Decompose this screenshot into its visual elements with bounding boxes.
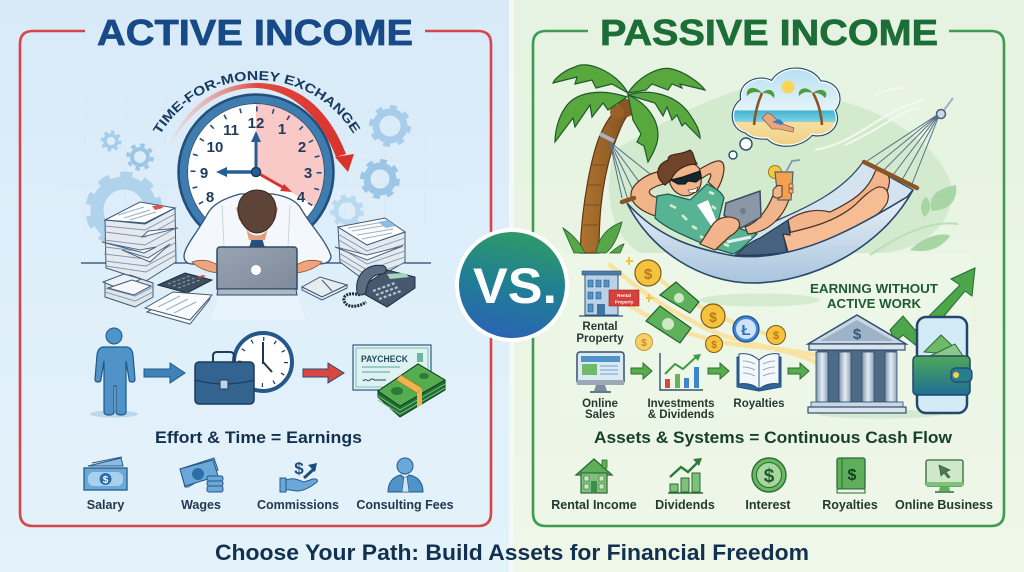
- icon: rental building: Rental: [617, 293, 631, 298]
- icon: rental building: [579, 271, 639, 316]
- palm tree: [553, 65, 705, 253]
- palm fronds: [553, 65, 705, 162]
- label: online sales: Online: [582, 398, 618, 410]
- green growth arrow: [890, 268, 975, 347]
- shirt: [655, 184, 757, 254]
- label: online business: Online Business: [895, 498, 993, 512]
- title: passive income: PASSIVE INCOME: [600, 12, 938, 53]
- title: active income: ACTIVE INCOME: [97, 12, 413, 53]
- clock numbers: 1: [278, 121, 286, 138]
- vs badge: [455, 228, 569, 342]
- label: rental property: Rental: [582, 321, 618, 333]
- lower panel tint: [560, 253, 970, 413]
- coins and banknotes: $: [711, 340, 717, 351]
- icon: investments chart: [660, 353, 703, 390]
- curved label: time-for-money exchange: TIME-FOR-MONEY EXCHANGE: [152, 70, 360, 134]
- arrow: royalties to bank: [788, 363, 809, 379]
- clock numbers: [200, 115, 312, 206]
- tablet: [700, 191, 761, 250]
- icon: salary: $: [103, 475, 109, 486]
- icon: online business monitor: [926, 460, 963, 492]
- earning caption second line: ACTIVE WORK: [827, 296, 922, 311]
- icon: commissions: $: [294, 459, 304, 478]
- footer headline: Choose Your Path: Build Assets for Financial Freedom: [215, 540, 809, 565]
- desk line: [81, 262, 431, 264]
- thought dots: [740, 138, 752, 150]
- notepad: [302, 277, 347, 300]
- decorative leaves: [870, 185, 958, 255]
- money flow ribbons: [610, 265, 815, 362]
- hammock ropes: [610, 98, 953, 200]
- icon: wages: [180, 458, 223, 492]
- office worker head down at desk: [184, 190, 331, 273]
- arrow: investments to royalties: [708, 363, 729, 379]
- label: commissions: Commissions: [257, 498, 339, 512]
- rear leg: [788, 169, 889, 240]
- spreader bars: [622, 198, 634, 202]
- ground shadow: [700, 294, 820, 306]
- label: investments and dividends: & Dividends: [648, 409, 714, 421]
- wind lines: [815, 88, 925, 150]
- clock numbers: 2: [298, 139, 306, 156]
- vs badge: VS.: [473, 258, 557, 314]
- clock numbers: 8: [206, 189, 214, 206]
- loose papers: [145, 292, 212, 324]
- icon: royalties book: $: [848, 467, 857, 484]
- coins and banknotes: $: [709, 309, 717, 325]
- clock numbers: 11: [223, 122, 239, 139]
- centre divider: [509, 0, 514, 572]
- clock numbers: 4: [297, 189, 306, 206]
- passive income frame: [533, 31, 1004, 526]
- coins and banknotes: [626, 257, 786, 352]
- red elapsed-time arrow: [168, 83, 354, 172]
- hand on tablet: [700, 217, 740, 250]
- head: [670, 162, 701, 196]
- left paper stack: [102, 202, 178, 281]
- label: investments and dividends: Investments: [647, 398, 715, 410]
- raised arm right: [695, 161, 724, 190]
- wall clock: [178, 94, 334, 250]
- laptop: [217, 247, 297, 295]
- icon: rental income house: [576, 459, 612, 493]
- coins and banknotes: $: [644, 266, 653, 283]
- label: online sales: Sales: [585, 409, 615, 421]
- clock numbers: 12: [248, 115, 264, 132]
- label: salary: Salary: [87, 498, 124, 512]
- coins and banknotes: Ł: [741, 322, 751, 339]
- right background: [513, 0, 1024, 572]
- icon: online sales monitor: [577, 352, 624, 392]
- icon: person: [90, 328, 138, 418]
- small paper pile: [103, 274, 153, 307]
- clock numbers: 9: [200, 165, 208, 182]
- hammock near band: [622, 162, 917, 283]
- forearm with drink: [745, 190, 790, 234]
- left background: [0, 0, 511, 572]
- coins and banknotes: $: [641, 338, 647, 349]
- arrow: effort to work: [144, 363, 185, 383]
- orange drink: [768, 160, 800, 200]
- equation: assets and systems: Assets & Systems = Continuous Cash Flow: [594, 428, 953, 447]
- laptop glow on desk: [210, 295, 306, 320]
- passive scene: green hill: [609, 88, 952, 253]
- active income frame: [20, 31, 491, 526]
- earning caption: EARNING WITHOUT: [810, 281, 938, 296]
- label: consulting fees: Consulting Fees: [356, 498, 454, 512]
- arrow: work to pay: [303, 363, 344, 383]
- label: rental property: Property: [576, 333, 624, 345]
- icon: interest coin: [752, 458, 786, 492]
- label: dividends: Dividends: [655, 498, 715, 512]
- icon: paycheck and cash: PAYCHECK: [361, 354, 408, 365]
- relaxing man in hammock: [631, 150, 889, 255]
- phone and wallet: [913, 317, 972, 413]
- clock numbers: 3: [304, 165, 312, 182]
- shorts: [737, 220, 790, 255]
- bank building: $: [853, 326, 862, 343]
- icon: dividends chart: [668, 458, 703, 493]
- equation: effort and time: Effort & Time = Earnings: [155, 428, 362, 447]
- icon: consultant: [388, 458, 423, 492]
- label: wages: Wages: [181, 498, 221, 512]
- right paper stack: [335, 218, 405, 283]
- icon: open book: [737, 354, 781, 391]
- label: royalties: Royalties: [822, 498, 878, 512]
- hammock far side: [735, 162, 913, 256]
- calculator: [158, 273, 212, 293]
- label: interest: Interest: [745, 498, 791, 512]
- icon: paycheck and cash: [353, 345, 445, 417]
- icon: commissions: [280, 459, 317, 492]
- elapsed time wedge: [256, 104, 328, 208]
- hair: [238, 190, 276, 233]
- coins and banknotes: $: [773, 330, 779, 342]
- label: royalties flow step: Royalties: [733, 398, 785, 410]
- front leg: [783, 187, 888, 252]
- active scene: gears behind clock: [89, 107, 409, 245]
- clock numbers: 10: [207, 139, 223, 156]
- clock hands: [216, 131, 292, 192]
- icon: clock and briefcase: [195, 333, 292, 404]
- desk phone: [344, 265, 415, 307]
- icon: salary: [84, 457, 127, 490]
- label: rental income: Rental Income: [551, 498, 637, 512]
- icon: royalties book: [837, 458, 865, 493]
- bank building: [808, 315, 942, 418]
- icon: rental building: Property: [615, 300, 634, 304]
- raised arm left: [631, 172, 668, 218]
- icon: interest coin: $: [764, 466, 775, 487]
- thought bubble with beach: [729, 69, 839, 159]
- arrow: sales to investments: [631, 363, 652, 379]
